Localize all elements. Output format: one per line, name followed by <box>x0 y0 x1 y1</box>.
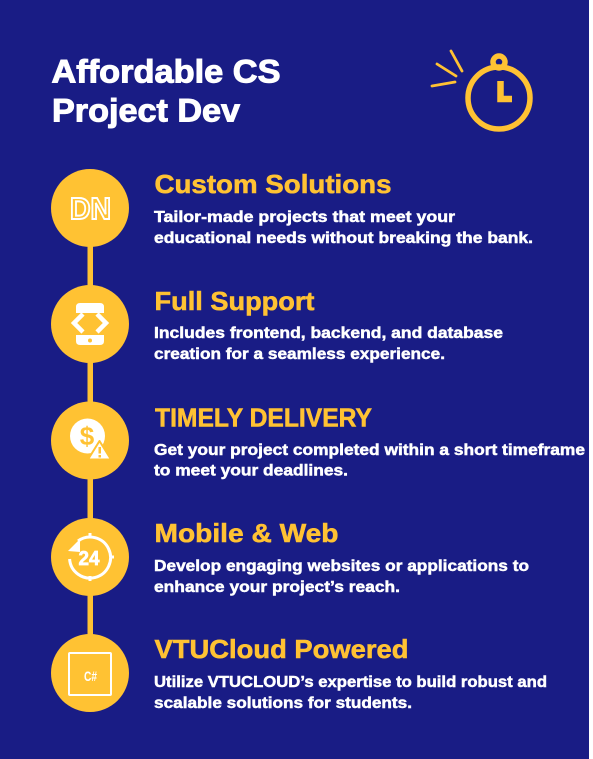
description: custom solutions: Tailor-made projects that meet your <box>154 209 455 226</box>
description: mobile and web <box>154 558 529 596</box>
icon: stopwatch with motion lines <box>432 51 530 129</box>
description: full support: Includes frontend, backend, and database <box>154 325 503 342</box>
icon: C sharp square: C# <box>84 668 97 684</box>
description: custom solutions: educational needs without breaking the bank. <box>154 230 533 247</box>
step 5: vtucloud powered <box>51 634 547 712</box>
icon: dollar coin with warning <box>51 402 129 480</box>
icon: DN monogram <box>51 169 129 247</box>
title: Affordable CS <box>52 54 280 90</box>
icon: DN monogram: DN <box>70 191 111 226</box>
heading: custom solutions: Custom Solutions <box>154 169 392 199</box>
icon: 24 hour cycle: 24 <box>78 548 100 570</box>
heading: timely delivery: TIMELY DELIVERY <box>155 402 372 432</box>
timeline connector <box>88 200 93 680</box>
step 4: mobile and web <box>51 518 529 596</box>
title <box>52 54 280 128</box>
description: timely delivery <box>154 442 585 480</box>
description: vtucloud powered: scalable solutions for students. <box>154 695 412 712</box>
description: vtucloud powered: Utilize VTUCLOUD’s expertise to build robust and <box>154 674 547 691</box>
step 3: timely delivery <box>51 402 585 480</box>
description: timely delivery: to meet your deadlines. <box>154 462 348 480</box>
icon: mobile code <box>51 285 129 363</box>
icon: 24 hour cycle <box>51 518 129 596</box>
heading: vtucloud powered: VTUCloud Powered <box>154 634 408 664</box>
description: mobile and web: Develop engaging websites or applications to <box>154 558 529 575</box>
heading: full support: Full Support <box>154 286 315 316</box>
description: custom solutions <box>154 209 533 247</box>
description: timely delivery: Get your project completed within a short timeframe <box>154 442 585 459</box>
description: vtucloud powered <box>154 674 547 712</box>
heading: mobile and web: Mobile & Web <box>154 518 338 548</box>
icon: C sharp square <box>51 634 129 712</box>
description: mobile and web: enhance your project’s reach. <box>154 579 400 596</box>
icon: dollar coin with warning: $ <box>80 421 95 451</box>
step 1: custom solutions <box>51 169 533 247</box>
title: Project Dev <box>52 92 240 128</box>
description: full support: creation for a seamless experience. <box>154 346 445 363</box>
step 2: full support <box>51 285 503 363</box>
description: full support <box>154 325 503 363</box>
